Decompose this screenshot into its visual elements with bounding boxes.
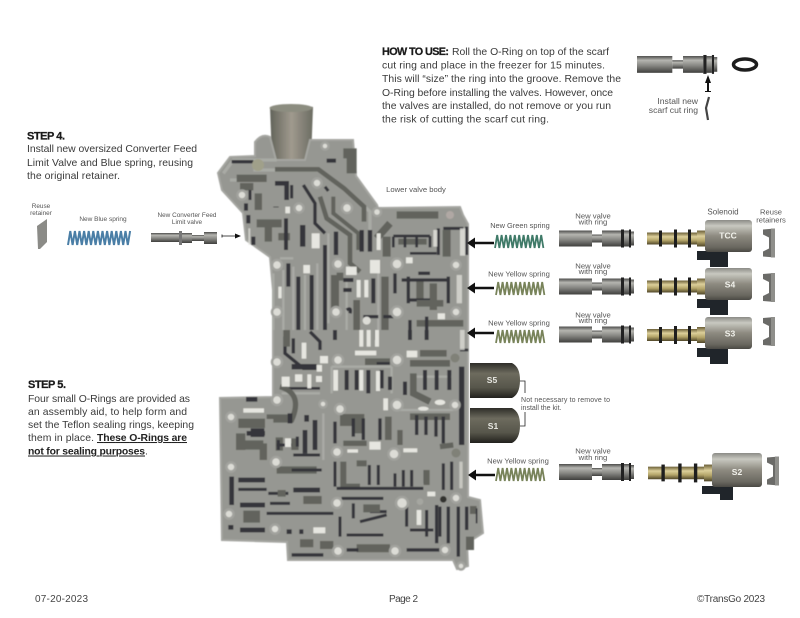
solenoid S3 [647, 317, 752, 364]
label: install new scarf cut ring [649, 96, 699, 115]
label: new valve with ring [575, 262, 611, 276]
text block: step 5: . [145, 446, 148, 458]
solenoid S2 [648, 453, 762, 500]
tube [270, 104, 313, 160]
label: new valve with ring: New valve [575, 446, 611, 456]
text block: how to use: cut ring and place in the freezer for 15 minutes. [382, 60, 605, 72]
label: new valve with ring: New valve [575, 262, 611, 270]
mounting holes [224, 142, 464, 570]
reuse retainer group [30, 203, 53, 249]
label: reuse retainer [30, 203, 53, 217]
label: new valve with ring [575, 446, 611, 462]
arrowhead: limit valve [235, 234, 241, 238]
label: new valve with ring: with ring [578, 218, 607, 226]
text block: how to use: Roll the O-Ring on top of the scarf [452, 47, 609, 58]
retainer [767, 456, 779, 486]
text block: step 5: them in place. [28, 433, 94, 444]
label: new valve with ring: New valve [575, 310, 611, 320]
column label: solenoid: Solenoid [707, 208, 739, 216]
text block: step 5: STEP 5. [28, 379, 66, 391]
footer: page number: Page 2 [389, 594, 418, 605]
text block: step 5: These O-Rings are [97, 433, 187, 444]
column label: reuse retainers [756, 208, 786, 224]
row: S2 [468, 446, 779, 500]
callout: not necessary to remove: install the kit. [521, 405, 562, 412]
solenoid S4 [647, 268, 752, 315]
arrow: to valve body [222, 234, 236, 238]
footer: copyright: ©TransGo 2023 [697, 594, 765, 605]
illustration: valve with scarf cut ring and O-ring [637, 55, 756, 120]
valve [559, 463, 634, 481]
text block: how to use: O-Ring before installing the valves. However, once [382, 88, 613, 99]
arrow: to ring groove [705, 75, 711, 92]
label: new valve with ring: New valve [575, 212, 611, 220]
solenoid S3: S3 [725, 328, 735, 338]
icon: blue spring [68, 231, 130, 245]
label: new blue spring: New Blue spring [79, 216, 127, 223]
text block: step 5: Four small O-Rings are provided as [28, 394, 190, 405]
label: new yellow spring: New Yellow spring [487, 456, 549, 466]
text block: step 4: Limit Valve and Blue spring, reusing [27, 158, 193, 169]
row: S3 [467, 310, 775, 364]
converter feed limit valve group [151, 212, 236, 245]
spring: yellow [496, 468, 544, 481]
text block: step 4: Install new oversized Converter Feed [27, 144, 197, 155]
channels upper half [223, 153, 467, 330]
solenoid S4: S4 [725, 280, 735, 290]
arrow: S2 row [468, 470, 495, 480]
arrow: S3 row [467, 328, 494, 338]
label: new valve with ring [575, 310, 611, 325]
spring: yellow [496, 330, 544, 343]
label: new converter feed limit valve: New Converter Feed [158, 212, 217, 219]
solenoid TCC: TCC [719, 230, 737, 240]
retainer [763, 273, 775, 302]
text block: step 5: an assembly aid, to help form and [28, 407, 187, 418]
text block: how to use: This will “size” the ring into the groove. Remove the [382, 74, 621, 85]
blue spring group [68, 216, 130, 245]
column label: reuse retainers: retainers [756, 216, 786, 224]
row: S4 [467, 262, 775, 315]
valve [559, 278, 634, 296]
column label: reuse retainers: Reuse [760, 208, 782, 216]
label: new valve with ring: with ring [578, 453, 607, 462]
arrow: TCC row [467, 238, 494, 248]
body outline [218, 136, 483, 569]
valve body casting [218, 104, 483, 570]
label: new yellow spring: New Yellow spring [488, 270, 550, 278]
text block: how to use: the valves are installed, do not remove or you run [382, 101, 611, 112]
valve [559, 230, 634, 248]
solenoid S5 [470, 363, 520, 398]
label: new yellow spring: New Yellow spring [488, 318, 550, 328]
label: new valve with ring: with ring [578, 316, 607, 325]
text block: step 4 [27, 130, 197, 182]
text block: step 5: set the Teflon sealing rings, keeping [28, 420, 194, 431]
text block: step 4: the original retainer. [27, 171, 120, 182]
label: new converter feed limit valve [158, 212, 217, 226]
retainer [763, 317, 775, 346]
arrow: S4 row [467, 282, 494, 294]
retainer [763, 228, 775, 258]
label: install new scarf cut ring: scarf cut ring [649, 105, 698, 115]
text block: how to use [382, 46, 621, 126]
callout: not necessary to remove [520, 381, 610, 426]
spring: green [495, 235, 543, 248]
spring: yellow [496, 282, 544, 295]
solenoid S1: S1 [488, 421, 498, 431]
solenoid S5: S5 [487, 375, 497, 385]
label: reuse retainer: retainer [30, 210, 53, 217]
channels lower half [228, 330, 477, 557]
icon: valve [637, 55, 717, 74]
text block: how to use: the risk of cutting the scarf cut ring. [382, 114, 549, 126]
text block: step 4: STEP 4. [27, 130, 65, 142]
row: TCC [467, 212, 775, 267]
solenoid TCC [647, 220, 752, 267]
label: new converter feed limit valve: Limit valve [172, 219, 203, 226]
label: install new scarf cut ring: Install new [657, 96, 699, 106]
valve [559, 326, 634, 344]
label: reuse retainer: Reuse [32, 203, 51, 210]
solenoid S2: S2 [732, 467, 742, 477]
text block: step 5 [28, 379, 194, 458]
label: lower valve body: Lower valve body [386, 185, 446, 194]
text block: how to use: HOW TO USE: [382, 46, 449, 58]
callout: not necessary to remove: Not necessary to remove to [521, 397, 610, 404]
solenoid S1 [470, 408, 520, 443]
icon: scarf cut ring [706, 97, 709, 120]
label: new valve with ring [575, 212, 611, 226]
icon: limit valve [151, 231, 217, 245]
text block: step 5: not for sealing purposes [28, 446, 145, 458]
label: new valve with ring: with ring [578, 267, 607, 276]
icon: O-ring [734, 59, 756, 70]
icon: retainer [37, 219, 47, 249]
footer: date: 07-20-2023 [35, 594, 88, 605]
label: new green spring: New Green spring [490, 221, 550, 230]
